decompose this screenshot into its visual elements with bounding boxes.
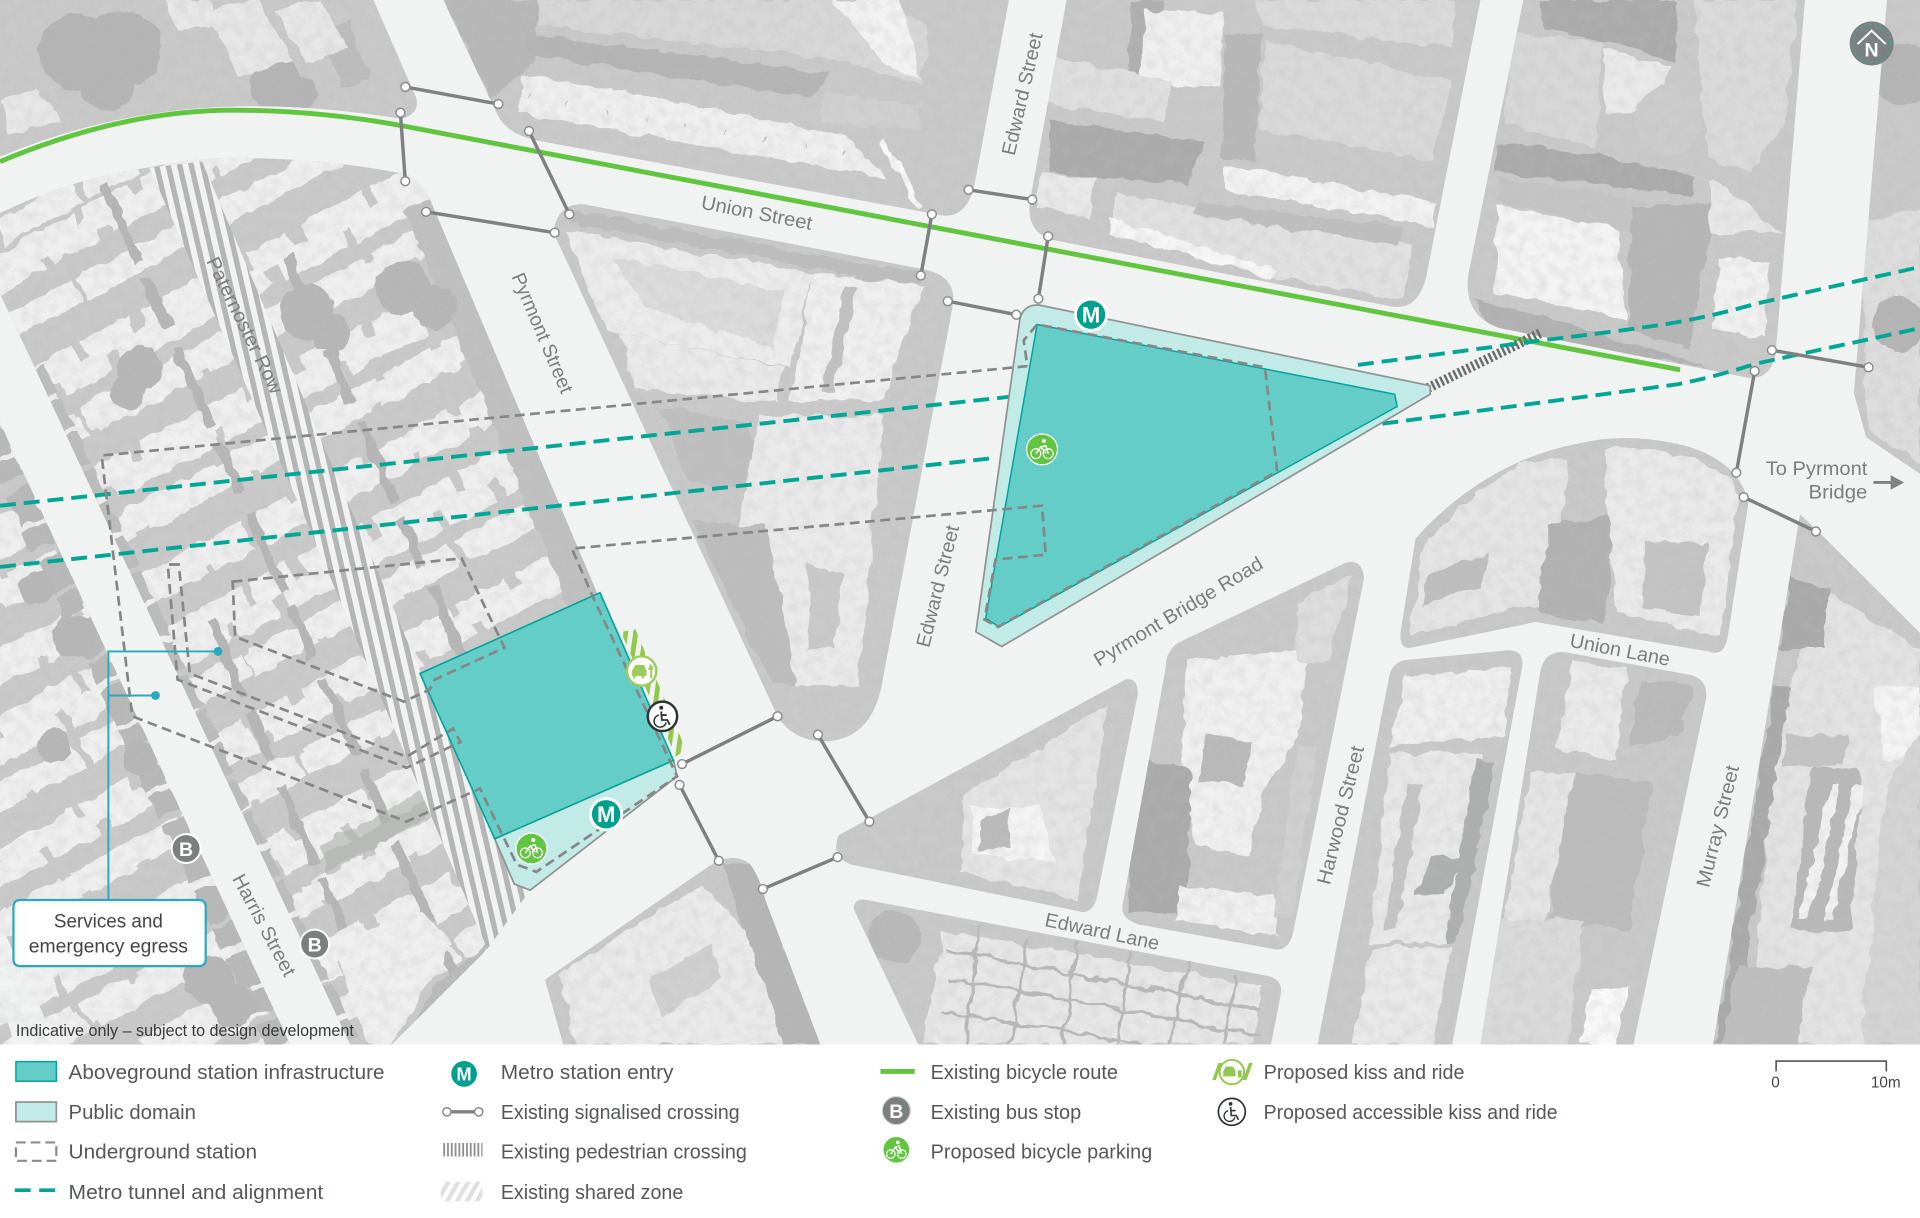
road strip, south-west: [0, 923, 58, 1044]
callout leader lines: [108, 648, 221, 900]
station site east: aboveground infrastructure: [986, 324, 1397, 627]
block east of Edward Street, north: [1036, 0, 1457, 300]
block triangular Edward Street east: [960, 704, 1108, 900]
icon: north arrow: N: [1865, 39, 1879, 61]
street names: Murray Street: [1692, 762, 1744, 890]
legend: proposed accessible kiss and ride: [1218, 1098, 1558, 1125]
legend: metro station entry: Metro station entry: [501, 1062, 674, 1084]
icon: bicycle parking east: [1027, 434, 1057, 465]
scale bar: 10m: [1871, 1074, 1901, 1091]
street names: Pyrmont Street: [507, 270, 577, 397]
legend panel background: [0, 1044, 1920, 1218]
icon: north arrow: [1850, 21, 1894, 66]
icon: proposed accessible kiss and ride: [648, 702, 677, 731]
icon: bus stop south: [299, 929, 330, 960]
callout: services and emergency egress: emergency egress: [29, 936, 188, 958]
kiss and ride hatch: [621, 629, 686, 757]
street names: Edward Lane: [1043, 909, 1161, 955]
street names: Edward Street: [912, 523, 964, 650]
street names: Harris Street: [228, 870, 300, 981]
street names: Paternoster Row: [202, 254, 287, 398]
block Pyrmont Street south: [561, 863, 820, 1044]
legend: existing bus stop: Existing bus stop: [931, 1102, 1081, 1124]
legend: existing bus stop: B: [889, 1101, 903, 1123]
block north of Union Street: [443, 0, 931, 208]
Paternoster Row shared zone hatch: [149, 162, 530, 949]
legend: proposed bicycle parking: [883, 1137, 1152, 1163]
legend: existing bicycle route: Existing bicycle route: [931, 1062, 1118, 1084]
scale bar: 0: [1771, 1074, 1780, 1091]
block between Pyrmont Street and Edward Street: [563, 211, 924, 686]
legend: aboveground station infrastructure: Aboveground station infrastructure: [69, 1062, 384, 1084]
icon: metro entry west: [589, 797, 623, 831]
icon: bus stop north: [171, 833, 202, 864]
block Pyrmont Bridge Road, Harwood Street: [1129, 576, 1353, 937]
block far south-east: [1714, 576, 1920, 1044]
block far north-east: [1861, 42, 1920, 465]
block south of Pyrmont Bridge Road, east: [1411, 447, 1739, 637]
metro tunnel and alignment: [0, 267, 1920, 567]
icon: metro entry west: M: [597, 802, 615, 827]
legend: [15, 1060, 1558, 1204]
legend: proposed kiss and ride: Proposed kiss and ride: [1264, 1062, 1464, 1084]
street names: Union Lane: [1568, 630, 1672, 671]
existing bicycle route: [0, 110, 1680, 370]
icon: bus stop north: B: [179, 839, 193, 861]
callout: services and emergency egress: [13, 900, 206, 966]
street names: Harwood Street: [1313, 743, 1369, 887]
existing pedestrian crossing: [1428, 333, 1540, 388]
existing signalised crossings: [396, 83, 1873, 893]
block between Harwood Street and Murray Street: [1353, 667, 1511, 1044]
legend: existing shared zone: Existing shared zone: [501, 1182, 683, 1204]
block west tip: [321, 790, 490, 1044]
block north-west: roofs: [0, 0, 349, 135]
station site west: aboveground infrastructure: [420, 593, 673, 839]
legend: metro tunnel and alignment: Metro tunnel and alignment: [69, 1182, 324, 1204]
station site east: public domain: [976, 305, 1430, 647]
legend: existing pedestrian crossing: Existing pedestrian crossing: [501, 1141, 747, 1163]
street names: [202, 30, 1744, 981]
legend: underground station: Underground station: [69, 1141, 257, 1163]
scale bar: [1771, 1061, 1901, 1091]
legend: public domain: [16, 1102, 196, 1124]
block Murray Street west: [1476, 660, 1696, 1044]
legend: proposed accessible kiss and ride: Proposed accessible kiss and ride: [1264, 1102, 1558, 1124]
callout: services and emergency egress: Services and: [54, 911, 163, 933]
note: indicative only: Indicative only – subject to design development: [16, 1021, 354, 1040]
block Edward Lane south: [868, 910, 1262, 1044]
icon: proposed kiss and ride: [627, 656, 656, 686]
underground station outlines: [102, 324, 1277, 872]
legend: existing bus stop: [882, 1097, 1081, 1125]
legend: public domain: Public domain: [69, 1102, 196, 1124]
block north-west: trees: [39, 10, 369, 110]
street names: Pyrmont Bridge Road: [1090, 553, 1267, 671]
icon: bus stop south: B: [308, 934, 322, 956]
to Pyrmont Bridge label and arrow: [1766, 458, 1904, 503]
legend: existing signalised crossing: Existing signalised crossing: [501, 1102, 740, 1124]
station site west: public domain: [495, 760, 677, 890]
legend: proposed bicycle parking: Proposed bicycle parking: [931, 1141, 1152, 1163]
block east, north of bicycle route: [1476, 0, 1798, 367]
street names: Union Street: [699, 192, 815, 235]
street names: Edward Street: [998, 30, 1048, 157]
icon: metro entry east: [1074, 298, 1108, 332]
icon: metro entry east: M: [1082, 303, 1100, 328]
legend: metro station entry: M: [456, 1064, 472, 1085]
to Pyrmont Bridge label and arrow: To Pyrmont: [1766, 458, 1868, 480]
terrace house rows west of Pyrmont Street: [0, 158, 597, 1044]
legend: metro station entry: [451, 1061, 674, 1087]
to Pyrmont Bridge label and arrow: Bridge: [1809, 481, 1867, 503]
icon: bicycle parking west: [516, 833, 547, 864]
